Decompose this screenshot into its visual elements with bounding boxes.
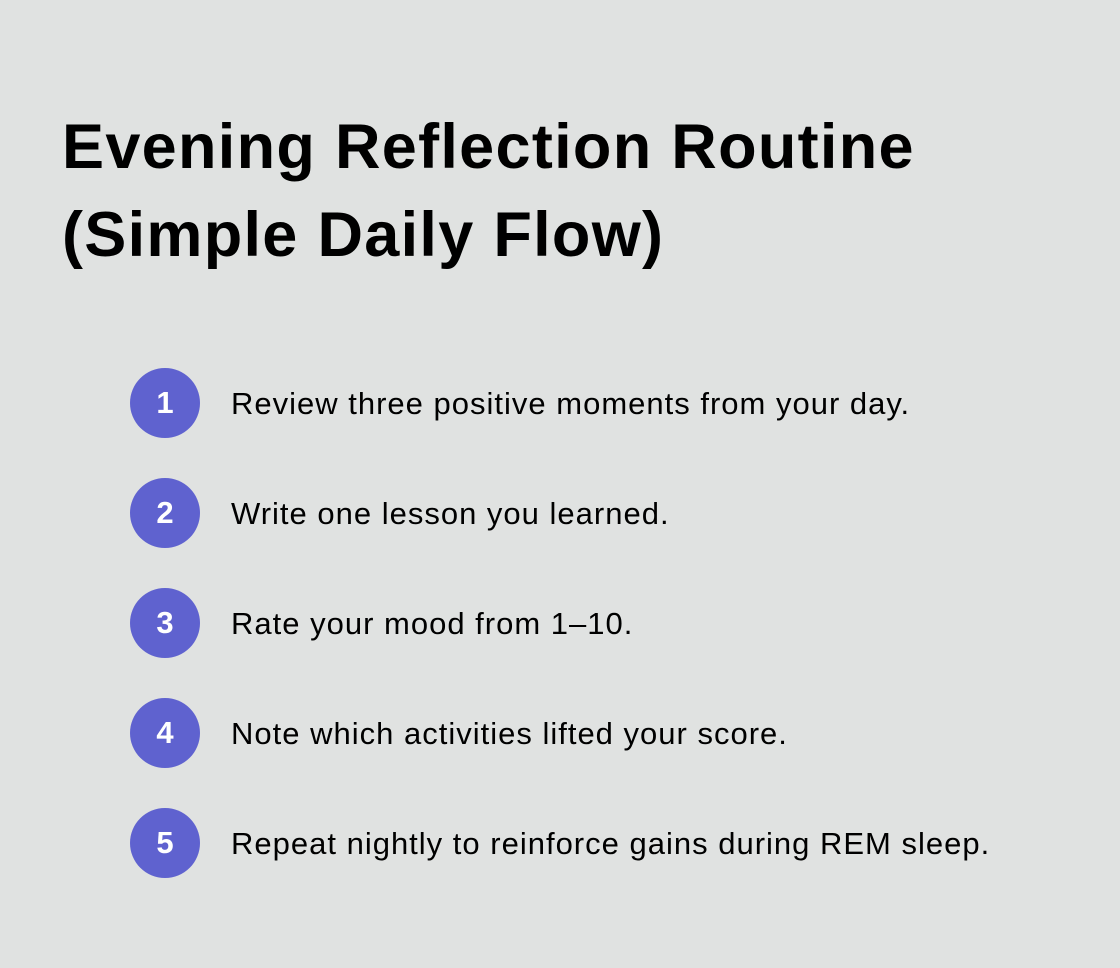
step 4: Note which activities lifted your score.	[231, 716, 788, 751]
step 5: 5	[156, 825, 174, 860]
title	[62, 112, 915, 270]
step 1: 1	[156, 385, 174, 420]
step 5	[130, 808, 990, 878]
step 3: 3	[156, 605, 174, 640]
step 3: Rate your mood from 1–10.	[231, 606, 633, 641]
step 2: Write one lesson you learned.	[231, 496, 670, 531]
step 2	[130, 478, 670, 548]
step 4: 4	[156, 715, 174, 750]
step 5: Repeat nightly to reinforce gains during REM sleep.	[231, 826, 990, 861]
step 3	[130, 588, 633, 658]
step 1: Review three positive moments from your day.	[231, 386, 910, 421]
step 4	[130, 698, 788, 768]
title: Evening Reflection Routine	[62, 112, 915, 182]
title: (Simple Daily Flow)	[62, 200, 664, 270]
step 2: 2	[156, 495, 174, 530]
steps list	[130, 368, 990, 878]
step 1	[130, 368, 910, 438]
